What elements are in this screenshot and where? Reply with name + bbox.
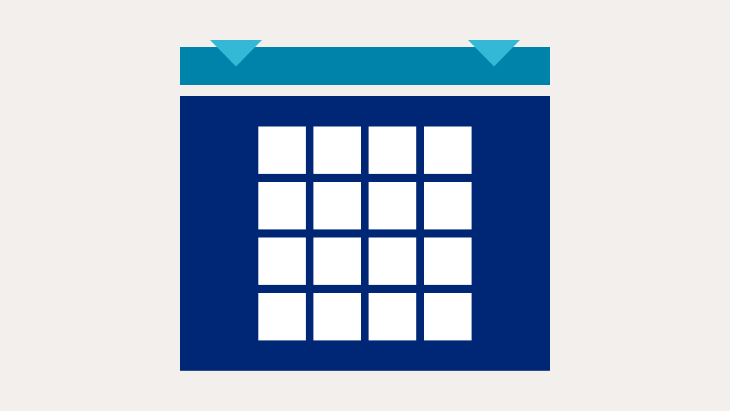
calendar header bar bbox=[180, 47, 550, 85]
icon: right binding tab bbox=[468, 40, 520, 66]
date grid bbox=[258, 126, 472, 340]
icon: left binding tab bbox=[210, 40, 262, 66]
calendar body panel bbox=[180, 96, 550, 371]
